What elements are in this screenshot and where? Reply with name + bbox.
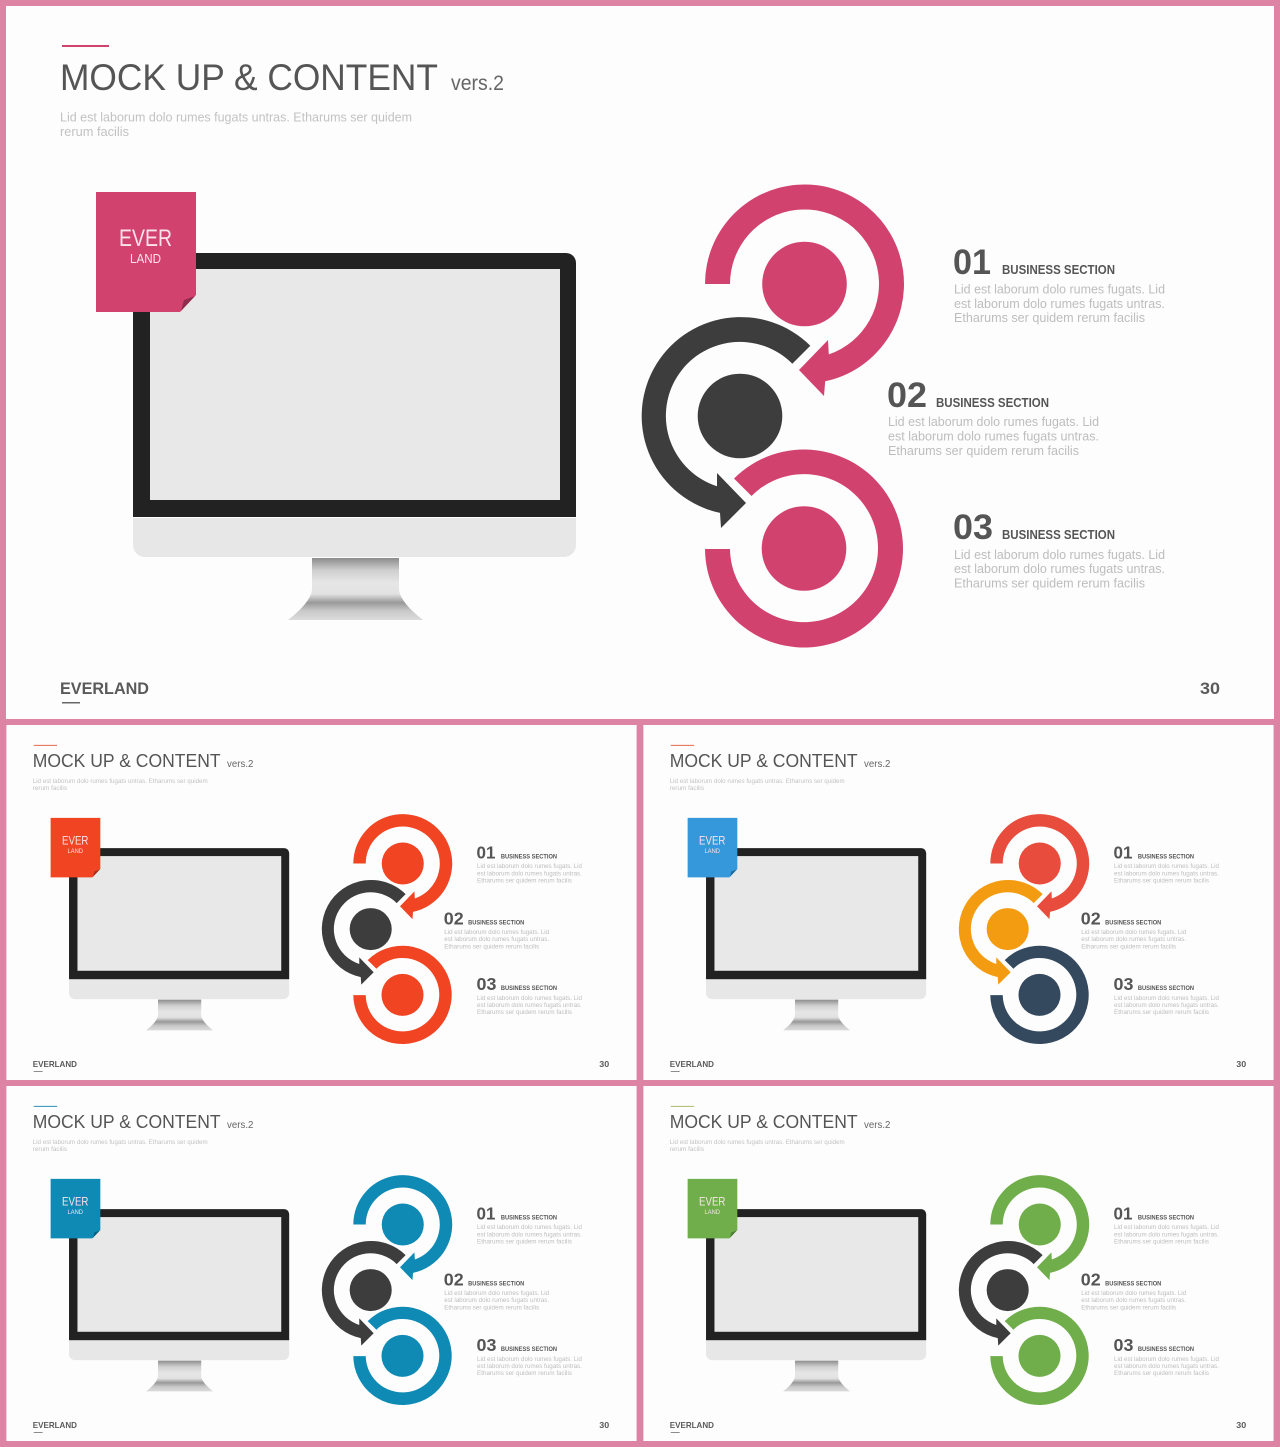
section 02 text [1081,1270,1187,1311]
subtitle: rerum facilis [670,785,704,792]
section 01 text [477,843,582,884]
section 02 text: 02 [444,909,464,929]
section 02 text: 02 [444,1270,464,1290]
section 02 text [887,376,1099,458]
title: MOCK UP & CONTENT [670,750,858,771]
section 02 text: Lid est laborum dolo rumes fugats. Lid [888,414,1099,429]
section 01 text [953,243,1165,325]
section 01 text: est laborum dolo rumes fugats untras. [477,870,582,877]
section 01 text: est laborum dolo rumes fugats untras. [1114,1231,1219,1238]
section 03 text: Etharums ser quidem rerum facilis [477,1370,572,1377]
section 01 text: BUSINESS SECTION [1138,854,1194,861]
section 02 text: est laborum dolo rumes fugats untras. [444,1297,549,1304]
footer brand: EVERLAND [670,1059,714,1069]
section 01 text: Etharums ser quidem rerum facilis [954,310,1145,325]
subtitle [670,1139,845,1153]
section 03 text: est laborum dolo rumes fugats untras. [477,1002,582,1009]
section 03 text: est laborum dolo rumes fugats untras. [1114,1002,1219,1009]
section 03 text [953,508,1165,590]
subtitle: rerum facilis [670,1146,704,1153]
brand tag: EVER [699,1195,726,1209]
section 02 text: 02 [1081,909,1101,929]
brand tag: EVER [62,834,89,848]
section 02 text: Lid est laborum dolo rumes fugats. Lid [444,1290,550,1297]
footer brand: EVERLAND [33,1420,77,1430]
brand tag [688,1179,737,1238]
title: MOCK UP & CONTENT [33,750,221,771]
brand tag: EVER [62,1195,89,1209]
section 02 text: est laborum dolo rumes fugats untras. [888,428,1099,444]
title: vers.2 [451,72,504,95]
cycle diagram [322,814,452,1044]
title: vers.2 [864,759,891,770]
brand tag: LAND [705,1209,720,1216]
ring 2 with arrow [642,317,810,528]
section 02 text [444,909,550,950]
section 01 text: Etharums ser quidem rerum facilis [1114,877,1209,884]
section 01 text: Lid est laborum dolo rumes fugats. Lid [954,282,1165,296]
brand tag: LAND [705,848,720,855]
ring 3 [353,1307,452,1405]
page number: 30 [599,1420,610,1430]
section 02 text: est laborum dolo rumes fugats untras. [444,936,549,943]
section 01 text: est laborum dolo rumes fugats untras. [477,1231,582,1238]
section 02 text: BUSINESS SECTION [1105,920,1162,927]
section 03 text: Etharums ser quidem rerum facilis [1114,1009,1209,1016]
brand tag [51,1179,100,1238]
section 02 text [1081,909,1187,950]
section 03 text: Lid est laborum dolo rumes fugats. Lid [1114,995,1219,1002]
brand tag: EVER [699,834,726,848]
section 01 text: Etharums ser quidem rerum facilis [477,877,572,884]
section 03 text: 03 [1114,1335,1134,1355]
section 01 text: est laborum dolo rumes fugats untras. [954,296,1165,311]
footer brand: EVERLAND [670,1420,714,1430]
section 02 text: 02 [887,376,927,415]
section 01 text: Lid est laborum dolo rumes fugats. Lid [1114,1224,1219,1231]
page number: 30 [1200,679,1220,698]
section 03 text [477,1335,582,1377]
subtitle: rerum facilis [60,124,129,139]
section 02 text: BUSINESS SECTION [936,395,1049,410]
section 01 text: 01 [477,843,496,863]
title: MOCK UP & CONTENT [33,1111,221,1132]
title: vers.2 [864,1120,891,1131]
ring 2 with arrow [959,880,1043,985]
section 03 text [1114,974,1219,1016]
subtitle: Lid est laborum dolo rumes fugats untras. Etharums ser quidem [60,110,412,124]
section 01 text: Etharums ser quidem rerum facilis [1114,1238,1209,1245]
ring 1 with arrow [353,814,452,919]
ring 1 with arrow [990,814,1089,919]
ring 3 [705,450,903,648]
section 01 text: Lid est laborum dolo rumes fugats. Lid [1114,863,1219,870]
section 01 text: 01 [477,1204,496,1224]
section 02 text: Lid est laborum dolo rumes fugats. Lid [1081,1290,1187,1297]
section 03 text: est laborum dolo rumes fugats untras. [477,1363,582,1370]
accent line [62,45,109,47]
section 02 text: Etharums ser quidem rerum facilis [888,443,1079,458]
panel: red variant slide [6,725,637,1080]
section 02 text: BUSINESS SECTION [1105,1281,1162,1288]
section 01 text [1114,843,1219,884]
section 03 text: Lid est laborum dolo rumes fugats. Lid [477,995,582,1002]
section 03 text: 03 [477,1335,497,1355]
accent line [671,744,694,747]
section 03 text: est laborum dolo rumes fugats untras. [1114,1363,1219,1370]
section 03 text: BUSINESS SECTION [1138,985,1194,992]
monitor mockup [133,253,576,620]
section 01 text: Etharums ser quidem rerum facilis [477,1238,572,1245]
section 01 text: 01 [1114,843,1133,863]
brand tag [96,192,196,312]
section 01 text [477,1204,582,1245]
subtitle [33,778,208,792]
subtitle [33,1139,208,1153]
section 01 text: Lid est laborum dolo rumes fugats. Lid [477,863,582,870]
subtitle [670,778,845,792]
section 01 text: BUSINESS SECTION [1138,1215,1194,1222]
section 03 text: BUSINESS SECTION [501,985,557,992]
section 01 text: Lid est laborum dolo rumes fugats. Lid [477,1224,582,1231]
ring 2 with arrow [959,1241,1043,1346]
section 03 text: 03 [953,508,993,547]
section 03 text: BUSINESS SECTION [501,1346,557,1353]
subtitle: rerum facilis [33,1146,67,1153]
cycle diagram [959,814,1089,1044]
section 03 text: 03 [477,974,497,994]
section 01 text: BUSINESS SECTION [501,1215,557,1222]
section 02 text: 02 [1081,1270,1101,1290]
subtitle: Lid est laborum dolo rumes fugats untras. Etharums ser quidem [33,778,208,785]
ring 3 [990,946,1089,1044]
panel: blue variant slide [6,1086,637,1441]
title: MOCK UP & CONTENT [60,56,438,98]
section 01 text [1114,1204,1219,1245]
section 02 text: est laborum dolo rumes fugats untras. [1081,1297,1186,1304]
footer brand: EVERLAND [60,679,149,698]
section 02 text: Etharums ser quidem rerum facilis [444,1304,539,1311]
section 03 text: BUSINESS SECTION [1138,1346,1194,1353]
section 01 text: 01 [953,243,991,282]
section 02 text: Etharums ser quidem rerum facilis [444,943,539,950]
section 03 text: Lid est laborum dolo rumes fugats. Lid [954,547,1165,562]
subtitle: rerum facilis [33,785,67,792]
section 01 text: BUSINESS SECTION [1002,262,1115,277]
section 03 text [477,974,582,1016]
ring 3 [990,1307,1089,1405]
section 02 text: Etharums ser quidem rerum facilis [1081,943,1176,950]
cycle diagram [322,1175,452,1405]
monitor mockup [706,848,926,1030]
section 02 text: Lid est laborum dolo rumes fugats. Lid [444,929,550,936]
section 01 text: 01 [1114,1204,1133,1224]
page number: 30 [599,1059,610,1069]
monitor mockup [706,1209,926,1391]
title: vers.2 [227,759,254,770]
panel: green variant slide [643,1086,1274,1441]
section 03 text: Lid est laborum dolo rumes fugats. Lid [477,1356,582,1363]
ring 2 with arrow [322,880,406,985]
section 03 text: Etharums ser quidem rerum facilis [477,1009,572,1016]
ring 1 with arrow [990,1175,1089,1280]
title: vers.2 [227,1120,254,1131]
brand tag [51,818,100,877]
subtitle [60,110,412,139]
ring 1 with arrow [705,184,904,396]
section 01 text: est laborum dolo rumes fugats untras. [1114,870,1219,877]
section 02 text: Lid est laborum dolo rumes fugats. Lid [1081,929,1187,936]
subtitle: Lid est laborum dolo rumes fugats untras. Etharums ser quidem [670,778,845,785]
section 03 text: Etharums ser quidem rerum facilis [1114,1370,1209,1377]
section 03 text [1114,1335,1219,1377]
section 02 text: est laborum dolo rumes fugats untras. [1081,936,1186,943]
accent line [34,744,57,747]
brand tag: LAND [68,848,83,855]
brand tag: LAND [68,1209,83,1216]
cycle diagram [959,1175,1089,1405]
brand tag [688,818,737,877]
subtitle: Lid est laborum dolo rumes fugats untras. Etharums ser quidem [33,1139,208,1146]
ring 1 with arrow [353,1175,452,1280]
section 02 text: BUSINESS SECTION [468,920,525,927]
footer brand: EVERLAND [33,1059,77,1069]
title: MOCK UP & CONTENT [670,1111,858,1132]
brand tag: LAND [130,252,161,266]
section 02 text: BUSINESS SECTION [468,1281,525,1288]
ring 3 [353,946,452,1044]
brand tag: EVER [119,225,172,252]
section 02 text: Etharums ser quidem rerum facilis [1081,1304,1176,1311]
monitor mockup [69,848,289,1030]
cycle diagram [642,184,904,648]
page number: 30 [1236,1059,1247,1069]
panel: multicolour variant slide [643,725,1274,1080]
section 01 text: BUSINESS SECTION [501,854,557,861]
section 02 text [444,1270,550,1311]
panel: main slide [6,6,1274,719]
section 03 text: Lid est laborum dolo rumes fugats. Lid [1114,1356,1219,1363]
section 03 text: BUSINESS SECTION [1002,527,1115,542]
section 03 text: est laborum dolo rumes fugats untras. [954,561,1165,576]
section 03 text: 03 [1114,974,1134,994]
accent line [34,1105,57,1108]
accent line [671,1105,694,1108]
ring 2 with arrow [322,1241,406,1346]
section 03 text: Etharums ser quidem rerum facilis [954,576,1145,590]
page number: 30 [1236,1420,1247,1430]
subtitle: Lid est laborum dolo rumes fugats untras. Etharums ser quidem [670,1139,845,1146]
monitor mockup [69,1209,289,1391]
